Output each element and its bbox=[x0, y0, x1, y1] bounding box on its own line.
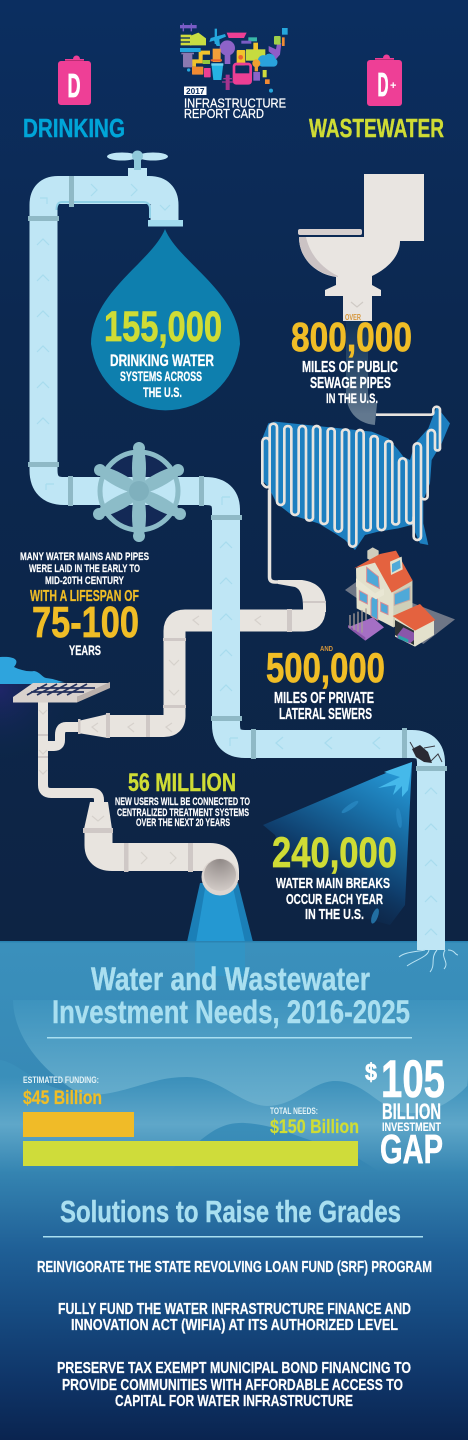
toilet seat bbox=[298, 229, 362, 235]
stat: over 800,000 miles of public sewage pipes: 800,000 bbox=[291, 314, 412, 360]
outfall reducer cone bbox=[84, 802, 112, 829]
US map with serpentine sewer pipe bbox=[262, 407, 450, 557]
stat: 240,000 water main breaks: OCCUR EACH YEAR bbox=[286, 891, 383, 908]
house bbox=[345, 547, 455, 647]
outfall stream into water bbox=[195, 942, 245, 976]
stat: and 500,000 miles of private lateral sewers: LATERAL SEWERS bbox=[279, 706, 372, 723]
total needs label bbox=[270, 1106, 359, 1138]
faucet handle bbox=[107, 150, 168, 179]
stat: and 500,000 miles of private lateral sewers: AND bbox=[320, 646, 333, 653]
water drop bbox=[91, 229, 240, 410]
stat: 240,000 water main breaks: WATER MAIN BREAKS bbox=[276, 875, 390, 892]
toilet bowl bbox=[299, 237, 400, 296]
logo wordmark bbox=[184, 96, 286, 121]
white pipe flanges bbox=[38, 601, 326, 872]
wheel rim bbox=[100, 452, 178, 530]
branch to grate bbox=[44, 727, 80, 746]
faded sewage pipe below toilet bbox=[357, 318, 376, 414]
porch railing bbox=[350, 608, 366, 633]
background blob bbox=[13, 1000, 468, 1172]
solution 3: CAPITAL FOR WATER INFRASTRUCTURE bbox=[115, 1393, 353, 1410]
text: lifespan of pipes bbox=[20, 551, 149, 658]
text: lifespan of pipes: 75-100 bbox=[32, 598, 139, 647]
stat: and 500,000 miles of private lateral sewers: 500,000 bbox=[266, 644, 385, 691]
logo icon map bbox=[180, 23, 288, 93]
stat: 56 million new users: NEW USERS WILL BE CONNECTED TO bbox=[115, 796, 250, 808]
heading: drinking: DRINKING bbox=[23, 113, 125, 143]
grate front bbox=[13, 697, 77, 702]
stat: 56 million new users: 56 MILLION bbox=[128, 769, 236, 797]
stat: over 800,000 miles of public sewage pipes bbox=[291, 313, 412, 406]
background wave bbox=[0, 1060, 468, 1172]
text: lifespan of pipes: MID-20TH CENTURY bbox=[45, 575, 124, 587]
car bbox=[397, 627, 414, 643]
stat: 240,000 water main breaks bbox=[272, 829, 397, 923]
toilet tank bbox=[364, 174, 424, 241]
outfall pipe opening bbox=[202, 858, 238, 896]
water main pipe bbox=[28, 176, 447, 950]
inner pipe shading bbox=[56, 202, 150, 218]
callout: $105 billion investment gap: $ bbox=[365, 1059, 378, 1086]
stat: 155,000 drinking water systems: DRINKING WATER bbox=[110, 352, 214, 370]
grade clipboard: wastewater D+ bbox=[367, 55, 402, 106]
estimated funding bar bbox=[23, 1112, 134, 1137]
solution 2 bbox=[58, 1301, 411, 1334]
stat: 56 million new users: CENTRALIZED TREATMENT SYSTEMS bbox=[117, 807, 249, 819]
water valve wheel bbox=[93, 442, 186, 542]
estimated funding label: $45 Billion bbox=[23, 1088, 102, 1109]
US map silhouette bbox=[262, 407, 450, 550]
white pipe chevrons bbox=[39, 616, 261, 864]
lateral sewer thin pipe bbox=[270, 490, 290, 582]
main roof bbox=[354, 551, 413, 593]
logo wordmark: INFRASTRUCTURE bbox=[184, 96, 286, 110]
callout: $105 billion investment gap: BILLION bbox=[382, 1099, 441, 1124]
faucet spout flange bbox=[148, 220, 183, 226]
estimated funding label: ESTIMATED FUNDING: bbox=[23, 1075, 99, 1085]
wheel spokes bbox=[93, 442, 185, 542]
wheel knobs bbox=[93, 442, 186, 542]
serpentine pipe bbox=[270, 407, 440, 557]
lateral main pipe bbox=[108, 605, 314, 726]
grate slots bbox=[27, 684, 95, 695]
water top edge bbox=[0, 941, 468, 942]
garage roof bbox=[393, 604, 435, 631]
lower pipe loop bbox=[414, 497, 421, 540]
grate top bbox=[13, 683, 110, 697]
heading: investment needs bbox=[52, 961, 410, 1030]
stat: and 500,000 miles of private lateral sewers bbox=[266, 644, 385, 723]
house ground bbox=[345, 582, 455, 644]
heading: investment needs: Water and Wastewater bbox=[91, 961, 370, 997]
logo wordmark: REPORT CARD bbox=[184, 107, 264, 121]
stat: over 800,000 miles of public sewage pipes: IN THE U.S. bbox=[326, 391, 378, 406]
total needs label: TOTAL NEEDS: bbox=[270, 1106, 318, 1116]
background low wave bbox=[170, 1123, 380, 1172]
chimney bbox=[367, 547, 379, 562]
stat: 155,000 drinking water systems: 155,000 bbox=[104, 303, 222, 351]
grade clipboard: drinking D: D bbox=[68, 67, 80, 104]
water spray from main break bbox=[263, 762, 412, 925]
storm grate bbox=[13, 682, 110, 702]
text: lifespan of pipes: WERE LAID IN THE EARLY TO bbox=[29, 563, 140, 575]
bowl shadow bbox=[299, 237, 338, 277]
grate down pipe bbox=[43, 702, 99, 805]
wheel shadow panel bbox=[100, 452, 178, 530]
narrowing coupler bbox=[78, 714, 108, 738]
toilet drain pipe bbox=[343, 296, 372, 321]
callout: $105 billion investment gap: INVESTMENT bbox=[382, 1120, 442, 1134]
solution 2: INNOVATION ACT (WIFIA) AT ITS AUTHORIZED LEVEL bbox=[71, 1317, 398, 1334]
grade clipboard: wastewater D+: D bbox=[378, 66, 388, 103]
main pipe body bbox=[44, 190, 431, 950]
stat: over 800,000 miles of public sewage pipes: SEWAGE PIPES bbox=[310, 375, 391, 392]
stat: 155,000 drinking water systems: SYSTEMS ACROSS bbox=[120, 368, 202, 384]
text: lifespan of pipes: MANY WATER MAINS AND PIPES bbox=[20, 551, 149, 563]
outfall pipe bbox=[98, 830, 225, 880]
stat: 56 million new users bbox=[115, 769, 250, 829]
solutions list bbox=[37, 1259, 432, 1410]
spray cone bbox=[263, 762, 412, 925]
estimated funding label bbox=[23, 1075, 102, 1109]
solution 3 bbox=[57, 1360, 411, 1410]
garage bbox=[395, 617, 434, 647]
pipe roots bbox=[399, 950, 458, 972]
grate side bbox=[77, 682, 110, 702]
spray droplets bbox=[340, 799, 403, 925]
text: lifespan of pipes: YEARS bbox=[69, 642, 101, 658]
toilet bbox=[298, 174, 424, 321]
grade clipboard: wastewater D+: + bbox=[390, 80, 396, 92]
callout: $105 billion investment gap bbox=[365, 1050, 445, 1172]
house body bbox=[356, 557, 412, 627]
pipe chevrons bbox=[37, 184, 437, 935]
stat: and 500,000 miles of private lateral sewers: MILES OF PRIVATE bbox=[274, 690, 374, 707]
wheel hub bbox=[129, 481, 149, 501]
stat: over 800,000 miles of public sewage pipes: MILES OF PUBLIC bbox=[302, 359, 398, 376]
bar chart: funding vs needs bbox=[23, 1075, 359, 1166]
stat: over 800,000 miles of public sewage pipes: OVER bbox=[345, 313, 361, 322]
lateral taper bend bbox=[278, 580, 326, 612]
outfall water stream bbox=[187, 883, 253, 942]
street runoff water bbox=[0, 657, 65, 684]
pipe flanges bbox=[28, 176, 447, 771]
pipe through wheel bbox=[98, 477, 180, 505]
total needs bar bbox=[23, 1141, 358, 1166]
left pipe loop bbox=[262, 438, 270, 487]
pipe break crack bbox=[410, 742, 442, 763]
left edge glow bbox=[0, 683, 70, 763]
logo: 2017 infrastructure report card bbox=[180, 23, 288, 121]
windows bbox=[367, 567, 379, 588]
spray splash bbox=[378, 762, 412, 797]
callout: $105 billion investment gap: 105 bbox=[381, 1050, 445, 1109]
grade clipboard: drinking D bbox=[58, 56, 91, 105]
stat: 56 million new users: OVER THE NEXT 20 YEARS bbox=[136, 817, 230, 829]
total needs label: $150 Billion bbox=[270, 1117, 359, 1138]
porch bbox=[348, 617, 384, 641]
stat: 240,000 water main breaks: IN THE U.S. bbox=[305, 906, 364, 923]
white wastewater pipes: lateral and main bbox=[43, 490, 326, 880]
text: lifespan of pipes: WITH A LIFESPAN OF bbox=[30, 588, 139, 605]
stat: 240,000 water main breaks: 240,000 bbox=[272, 829, 397, 877]
logo year tag: 2017 bbox=[186, 87, 205, 96]
callout: $105 billion investment gap: GAP bbox=[380, 1126, 443, 1172]
water section background bbox=[0, 941, 468, 1440]
dormer bbox=[390, 557, 403, 575]
background bbox=[0, 0, 468, 945]
drain chevron bbox=[351, 302, 363, 307]
stat: 155,000 drinking water systems bbox=[104, 303, 222, 400]
stat: 155,000 drinking water systems: THE U.S. bbox=[143, 384, 182, 400]
